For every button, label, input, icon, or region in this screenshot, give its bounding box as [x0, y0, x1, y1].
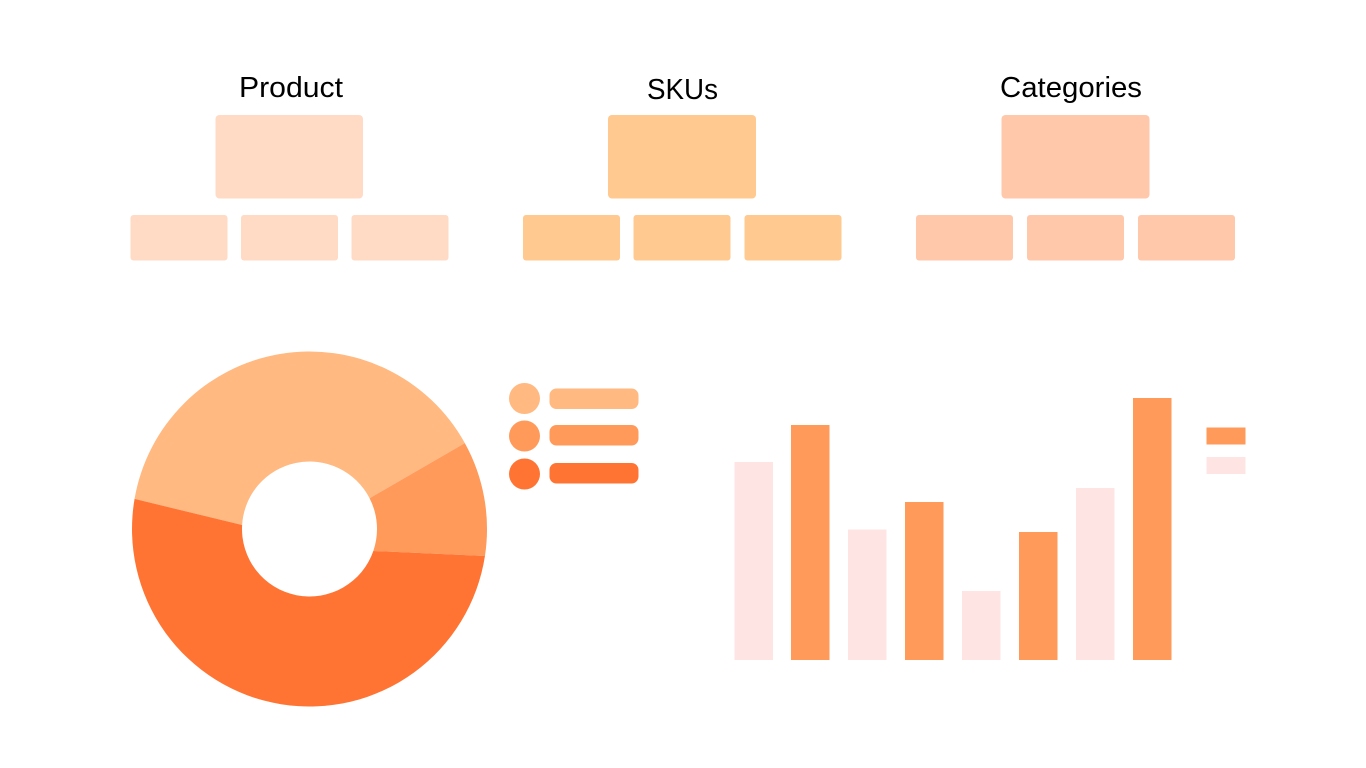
panel: skus — [523, 74, 842, 260]
bars: pale series — [734, 462, 1114, 660]
panel: product — [130, 72, 448, 260]
legend swatch: orange — [1206, 428, 1246, 444]
hierarchy: product boxes — [130, 115, 448, 260]
panel: categories — [916, 72, 1235, 260]
donut segment: dark orange — [132, 499, 485, 707]
heading: categories: Categories — [1000, 72, 1142, 104]
hierarchy: categories boxes — [916, 115, 1235, 260]
legend item: dark orange — [509, 458, 638, 490]
hierarchy: skus boxes — [523, 115, 842, 260]
bars: orange series — [791, 398, 1172, 660]
heading: skus: SKUs — [647, 74, 718, 106]
donut segment: light orange — [135, 352, 465, 525]
bar chart legend — [1206, 428, 1246, 474]
heading: product: Product — [239, 72, 343, 104]
donut legend — [509, 383, 638, 490]
legend swatch: pale — [1206, 457, 1246, 474]
donut segment: medium orange — [370, 443, 487, 556]
donut chart — [132, 352, 487, 707]
legend item: medium orange — [509, 420, 638, 452]
bar chart — [734, 398, 1172, 660]
legend item: light orange — [509, 383, 638, 414]
